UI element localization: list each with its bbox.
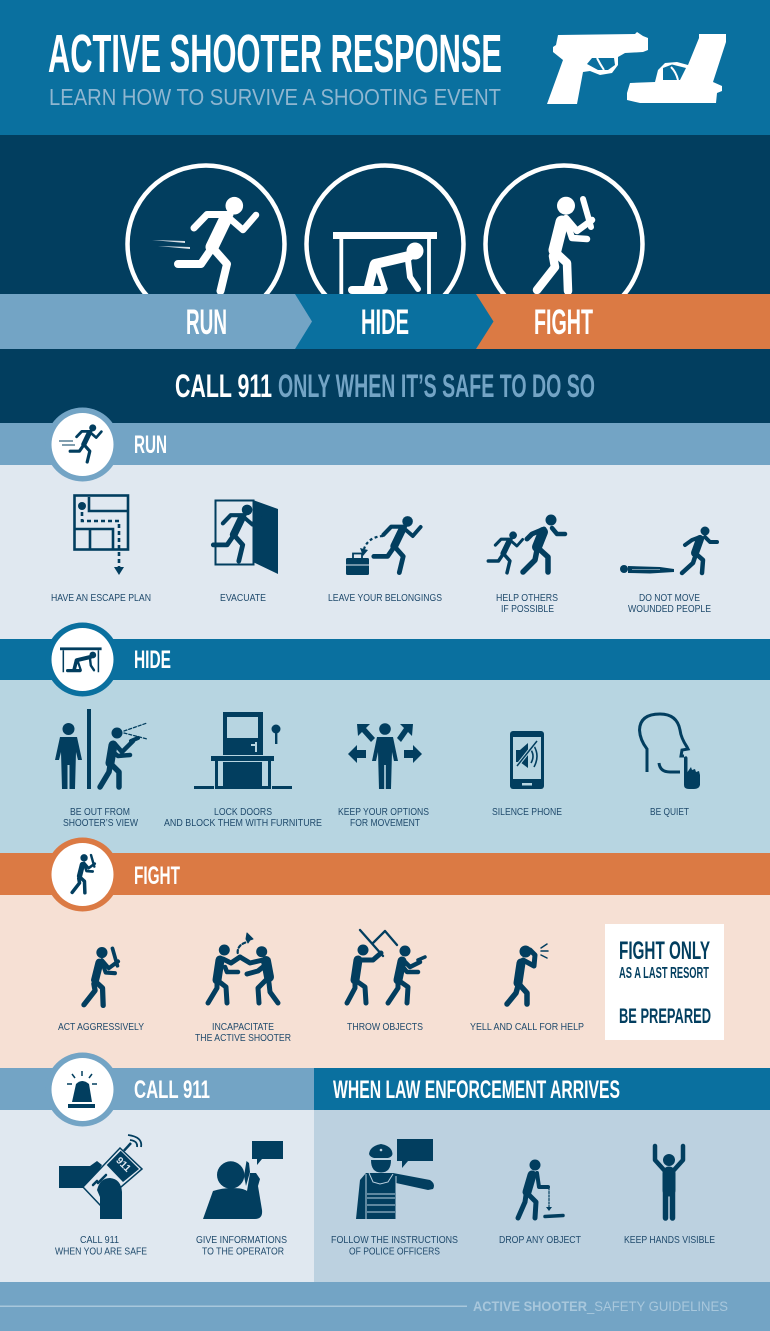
caption: FOLLOW THE INSTRUCTIONS <box>331 1234 458 1246</box>
arrow band: run hide fight: HIDE <box>361 303 409 342</box>
caption: INCAPACITATE <box>212 1021 274 1033</box>
icon: run hero circle <box>125 163 287 294</box>
caption: DROP ANY OBJECT <box>499 1234 581 1246</box>
icon: evacuate door <box>213 500 278 574</box>
caption: LEAVE YOUR BELONGINGS <box>328 592 442 604</box>
caption: ACT AGGRESSIVELY <box>58 1021 144 1033</box>
panel: header <box>0 0 770 135</box>
caption: YELL AND CALL FOR HELP <box>470 1021 584 1033</box>
footer: _SAFETY GUIDELINES <box>586 1298 728 1314</box>
caption: WHEN YOU ARE SAFE <box>55 1246 147 1258</box>
icon: hands up <box>655 1146 683 1218</box>
caption <box>196 1234 287 1258</box>
caption: BE OUT FROM <box>70 806 130 818</box>
run heading: RUN <box>134 431 167 459</box>
caption <box>195 1021 291 1044</box>
icon: yell for help <box>507 944 548 1004</box>
caption: WOUNDED PEOPLE <box>628 603 711 615</box>
footer: ACTIVE SHOOTER <box>473 1298 587 1314</box>
icon: incapacitate shooter <box>208 933 278 1003</box>
icon: hide hero circle <box>304 163 466 294</box>
fight badge <box>46 838 120 912</box>
caption: THROW OBJECTS <box>347 1021 423 1033</box>
icon: escape plan <box>74 496 128 575</box>
arrow band: run hide fight <box>0 294 770 349</box>
call 911 heading: CALL 911 <box>134 1076 210 1104</box>
caption: OF POLICE OFFICERS <box>349 1246 440 1258</box>
icon: act aggressively <box>84 947 118 1005</box>
caption <box>496 592 558 615</box>
icon: leave belongings <box>346 516 421 575</box>
icon: person on phone with speech bubble <box>203 1141 283 1219</box>
callout: fight only as a last resort: AS A LAST RESORT <box>619 965 709 982</box>
icon: hand holding phone: 911 <box>113 1155 133 1175</box>
icon: do not move wounded <box>620 526 717 574</box>
panel: when law enforcement arrives <box>314 1068 770 1282</box>
icon: silent phone <box>510 731 544 789</box>
callout: fight only as a last resort: BE PREPARED <box>619 1004 711 1028</box>
caption: AND BLOCK THEM WITH FURNITURE <box>164 817 322 829</box>
caption: TO THE OPERATOR <box>202 1246 284 1258</box>
caption: CALL 911 <box>80 1234 119 1246</box>
caption: KEEP HANDS VISIBLE <box>624 1234 715 1246</box>
caption <box>331 1234 458 1258</box>
icon: be quiet head <box>640 714 700 789</box>
caption: EVACUATE <box>220 592 266 604</box>
caption: HAVE AN ESCAPE PLAN <box>51 592 151 604</box>
caption: THE ACTIVE SHOOTER <box>195 1032 291 1044</box>
icon: options for movement <box>348 723 422 789</box>
callout: fight only as a last resort <box>605 924 724 1040</box>
caption: IF POSSIBLE <box>501 603 554 615</box>
panel: call 911 <box>0 1052 314 1282</box>
caption <box>338 806 429 829</box>
panel: hide <box>0 622 770 853</box>
icon: police officer <box>356 1139 434 1219</box>
fight heading: FIGHT <box>134 862 180 890</box>
caption: SILENCE PHONE <box>492 806 562 818</box>
caption: FOR MOVEMENT <box>350 817 420 829</box>
icon: two handguns <box>547 32 726 104</box>
icon: help others <box>488 514 565 573</box>
caption <box>63 806 138 829</box>
callout: fight only as a last resort: FIGHT ONLY <box>619 937 710 965</box>
caption: HELP OTHERS <box>496 592 558 604</box>
arrow band: run hide fight: FIGHT <box>534 303 593 342</box>
icon: locked door and table <box>194 712 292 789</box>
call to action text: CALL 911 <box>175 368 272 404</box>
icon: drop any object <box>518 1160 563 1218</box>
caption <box>55 1234 147 1258</box>
subtitle: LEARN HOW TO SURVIVE A SHOOTING EVENT <box>49 84 501 110</box>
caption: BE QUIET <box>650 806 689 818</box>
siren badge <box>46 1052 120 1126</box>
run badge <box>46 408 120 482</box>
icon: hand holding phone <box>59 1135 142 1219</box>
call to action text <box>175 368 595 404</box>
panel: fight <box>0 838 770 1068</box>
icon: out of shooter's view <box>55 709 147 789</box>
caption: DO NOT MOVE <box>639 592 700 604</box>
icon: throw objects <box>347 930 425 1003</box>
caption <box>164 806 322 829</box>
panel: run <box>0 408 770 639</box>
caption: LOCK DOORS <box>214 806 272 818</box>
panel: dark hero background <box>0 135 770 423</box>
caption <box>628 592 711 615</box>
hide heading: HIDE <box>134 646 171 674</box>
caption: KEEP YOUR OPTIONS <box>338 806 429 818</box>
caption: SHOOTER’S VIEW <box>63 817 138 829</box>
footer <box>0 1282 770 1331</box>
hide badge <box>46 622 120 696</box>
arrow band: run hide fight: RUN <box>186 303 227 342</box>
caption: GIVE INFORMATIONS <box>196 1234 287 1246</box>
icon: fight hero circle <box>483 163 645 294</box>
